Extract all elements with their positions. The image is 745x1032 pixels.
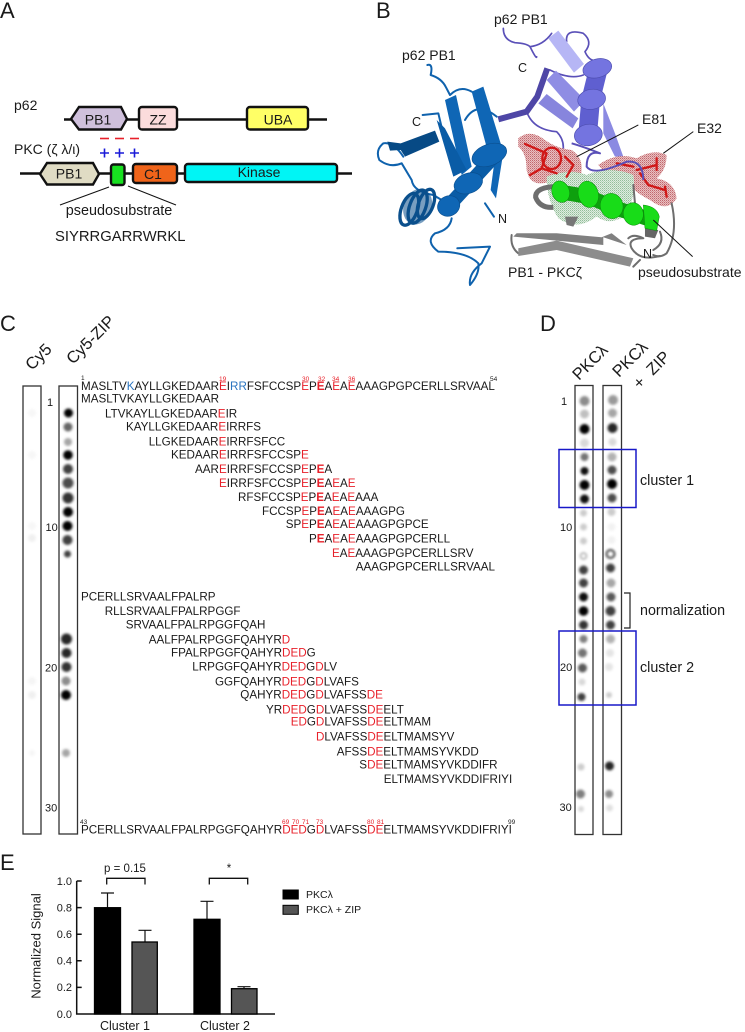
significance labels: * (227, 863, 232, 875)
legend: PKCλ (306, 889, 334, 901)
panel C row numbers: 20 (45, 662, 57, 674)
y axis title: Normalized Signal (28, 893, 44, 999)
full C-terminal sequence: PCERLLSRVAALFPALRPGGFQAHYRDEDGDLVAFSSDEELTMAMSYVKDDIFRIYI (81, 823, 512, 836)
pseudosubstrate sequence: SIYRRGARRWRKL (55, 229, 185, 245)
peptide sequences: C-terminal (80, 590, 516, 836)
residue numbers: 32 (318, 376, 326, 383)
panel label D: D (540, 311, 556, 336)
panel D row numbers: 1 (561, 396, 567, 408)
green pseudosubstrate helix (549, 178, 659, 231)
peptide sequences: C-terminal: RLLSRVAALFPALRPGGF (105, 605, 241, 618)
full N-terminal sequence: MASLTVKAYLLGKEDAAREIRRFSFCCSPEPEAEAEAAAGPGPCERLLSRVAAL (81, 380, 495, 393)
peptide sequences: N-terminal: MASLTVKAYLLGKEDAAR (81, 393, 219, 406)
peptide sequences: C-terminal: LRPGGFQAHYRDEDGDLV (192, 661, 337, 674)
significance labels: p = 0.15 (104, 863, 146, 875)
panel D lane headers: + (629, 373, 649, 393)
panel B labels: E32 (697, 120, 722, 136)
violet p62 PB1 ribbon (498, 28, 623, 157)
y tick labels: 0.8 (57, 902, 72, 914)
residue numbers: 80 (367, 819, 375, 826)
residue numbers (81, 375, 498, 383)
significance labels (104, 863, 232, 875)
panel D labels: cluster 2 (640, 660, 694, 676)
y tick labels: 1.0 (57, 876, 72, 888)
panel D lane headers (569, 338, 674, 393)
peptide sequences: C-terminal: SDEELTMAMSYVKDDIFR (359, 758, 498, 771)
peptide sequences: N-terminal: FCCSPEPEAEAEAAAGPG (262, 505, 405, 518)
cluster 2 highlight box (559, 631, 636, 705)
panel C row numbers: 30 (45, 802, 57, 814)
normalization bracket (624, 593, 630, 628)
residue numbers: 71 (302, 819, 310, 826)
peptide sequences: N-terminal: LTVKAYLLGKEDAAREIR (105, 407, 237, 420)
panel D row numbers (560, 396, 572, 814)
panel B labels: C (412, 115, 421, 129)
legend: PKCλ + ZIP (306, 904, 361, 916)
blot: PKC lambda plus ZIP (603, 386, 622, 834)
panel B labels: p62 PB1 (494, 11, 548, 27)
p62 domain names: ZZ (149, 112, 167, 128)
panel D labels: normalization (640, 603, 725, 619)
PKC domain architecture (20, 163, 352, 185)
panel D lane headers: ZIP (643, 348, 674, 379)
significance brackets (107, 878, 248, 884)
charge marks (100, 138, 139, 158)
panel D row numbers: 30 (560, 802, 572, 814)
PKC domain names: Kinase (238, 164, 281, 180)
peptide sequences: N-terminal: KEDAAREIRRFSFCCSPE (171, 448, 309, 461)
panel C lane headers: Cy5-ZIP (63, 312, 119, 368)
peptide sequences: N-terminal (81, 375, 498, 574)
panel B labels: pseudosubstrate (638, 264, 742, 280)
y tick labels: 0.0 (57, 1009, 72, 1021)
pseudosubstrate label: pseudosubstrate (66, 203, 172, 219)
panel E: bar chart (28, 863, 361, 1032)
violet loop over the interface (572, 143, 643, 180)
residue numbers: 30 (302, 376, 310, 383)
y tick labels (57, 876, 72, 1021)
residue numbers (80, 819, 516, 826)
panel B labels: N (498, 212, 507, 226)
peptide sequences: C-terminal: QAHYRDEDGDLVAFSSDE (240, 689, 383, 702)
PKC domain names: C1 (144, 166, 162, 182)
residue numbers: 99 (508, 819, 516, 826)
peptide sequences: C-terminal: EDGDLVAFSSDEELTMAM (291, 716, 431, 729)
y tick labels: 0.4 (57, 956, 72, 968)
PKC label: PKC (ζ λ/ι) (14, 141, 80, 157)
peptide sequences: N-terminal: EAEAAAGPGPCERLLSRV (332, 547, 474, 560)
panel D labels (640, 473, 725, 676)
panel C lane headers (22, 312, 119, 374)
p62 domain architecture (64, 107, 327, 130)
peptide sequences: C-terminal: AALFPALRPGGFQAHYRD (149, 633, 290, 646)
blot: Cy5 (23, 386, 41, 834)
panel label C: C (0, 311, 16, 336)
panel C row numbers (45, 397, 58, 814)
panel A: domain diagrams (14, 97, 352, 245)
peptide sequences: C-terminal: GGFQAHYRDEDGDLVAFS (215, 675, 359, 688)
peptide sequences: N-terminal: SPEPEAEAEAAAGPGPCE (286, 518, 429, 531)
red acidic surface mesh (518, 134, 677, 206)
peptide sequences: C-terminal: YRDEDGDLVAFSSDEELT (266, 703, 404, 716)
panel D lane headers: PKCλ (569, 341, 612, 384)
green surface mesh (547, 170, 634, 225)
PKC domain names: PB1 (56, 166, 82, 182)
panel label E: E (0, 850, 15, 875)
residue numbers: 69 (282, 819, 290, 826)
panel B labels: PB1 - PKCζ (508, 264, 582, 280)
peptide sequences: C-terminal: DLVAFSSDEELTMAMSYV (316, 731, 455, 744)
residue numbers: 70 (292, 819, 300, 826)
residue numbers: 1 (81, 375, 85, 382)
panel B: protein structure (378, 28, 693, 285)
p62 label: p62 (14, 97, 38, 113)
residue numbers: 43 (80, 819, 88, 826)
panel D row numbers: 10 (560, 522, 572, 534)
residue numbers: 36 (348, 376, 356, 383)
panel C lane headers: Cy5 (22, 340, 56, 374)
peptide sequences: N-terminal: AAAGPGPCERLLSRVAAL (356, 561, 496, 574)
residue numbers: 19 (219, 376, 227, 383)
panel B labels: N (643, 247, 652, 261)
peptide sequences: N-terminal: AAREIRRFSFCCSPEPEA (195, 463, 332, 476)
panel C row numbers: 10 (46, 522, 58, 534)
structure leader lines (577, 125, 693, 257)
legend (283, 889, 361, 916)
residue numbers: 54 (490, 376, 498, 383)
peptide sequences: N-terminal: EIRRFSFCCSPEPEAEAE (219, 477, 356, 490)
p62 domain names: PB1 (85, 112, 111, 128)
error bars (101, 893, 250, 988)
peptide sequences: C-terminal: ELTMAMSYVKDDIFRIYI (384, 773, 512, 786)
bars cluster 2 (194, 919, 257, 1014)
peptide sequences: C-terminal: SRVAALFPALRPGGFQAH (126, 618, 265, 631)
p62 domain names: UBA (264, 112, 293, 128)
residue numbers: 81 (377, 819, 385, 826)
peptide sequences: C-terminal: AFSSDEELTMAMSYVKDD (337, 745, 479, 758)
panel B labels: E81 (642, 111, 667, 127)
grey PB1 PKC ribbon (511, 185, 674, 267)
blot: Cy5-ZIP (59, 386, 78, 834)
p62 domain names (85, 112, 293, 128)
residue numbers: 73 (316, 819, 324, 826)
peptide sequences: N-terminal: RFSFCCSPEPEAEAEAAA (238, 491, 379, 504)
peptide sequences: C-terminal: PCERLLSRVAALFPALRP (81, 590, 216, 603)
peptide sequences: N-terminal: LLGKEDAAREIRRFSFCC (149, 435, 285, 448)
peptide sequences: N-terminal: PEAEAEAAAGPGPCERLL (309, 533, 451, 546)
peptide sequences: N-terminal: KAYLLGKEDAAREIRRFS (126, 421, 261, 434)
bars cluster 1 (94, 908, 157, 1014)
panel B labels: p62 PB1 (402, 47, 456, 63)
cluster 1 highlight box (559, 450, 636, 508)
panel D row numbers: 20 (560, 662, 572, 674)
panel B labels (402, 11, 742, 280)
blot: PKC lambda (575, 386, 593, 834)
blue p62 PB1 ribbon (378, 65, 510, 285)
PKC domain names (56, 164, 281, 182)
panel C row numbers: 1 (47, 397, 53, 409)
panel D lane headers: PKCλ (609, 338, 652, 381)
axes (77, 881, 275, 1014)
pseudosubstrate leader lines (60, 186, 176, 205)
y tick labels: 0.6 (57, 929, 72, 941)
x labels (100, 1019, 250, 1032)
residue numbers: 34 (332, 376, 340, 383)
panel D labels: cluster 1 (640, 473, 694, 489)
y tick labels: 0.2 (57, 982, 72, 994)
red side chains (525, 144, 667, 197)
peptide sequences: C-terminal: FPALRPGGFQAHYRDEDG (171, 646, 316, 659)
panel B labels: C (518, 61, 527, 75)
